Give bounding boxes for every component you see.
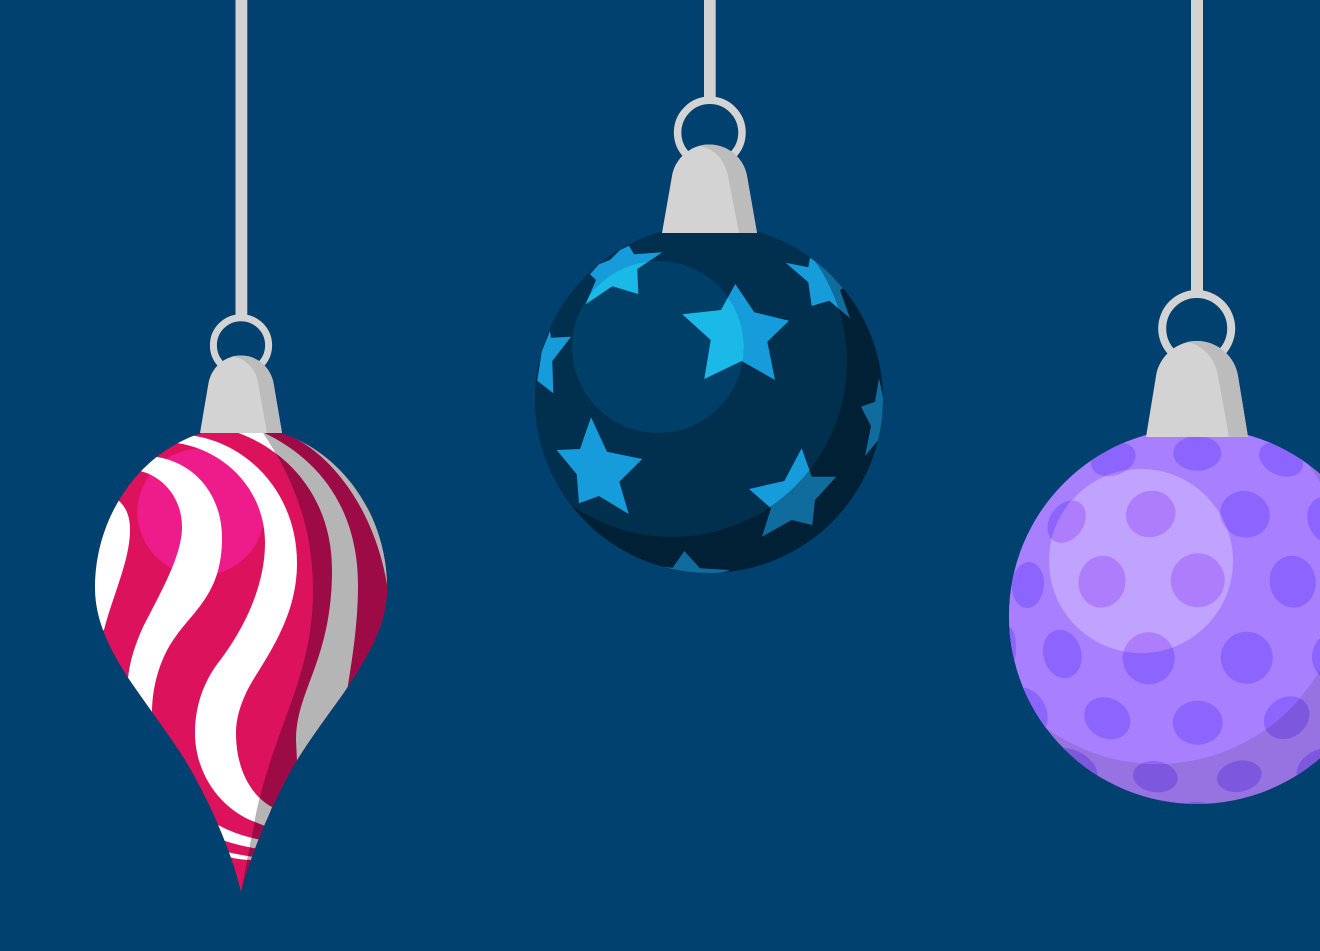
hanger: purple bauble string and ring — [1162, 0, 1231, 363]
ball body with stars, shading and highlight — [535, 232, 883, 573]
hanger: red bauble string and ring — [213, 0, 269, 373]
cap: red bauble — [200, 356, 282, 433]
bauble: purple with dots — [1009, 0, 1320, 804]
bauble: red striped teardrop — [80, 0, 400, 895]
ball body with dots, shading and highlight — [1009, 435, 1320, 804]
bauble: dark blue with stars — [535, 0, 883, 573]
cap: purple bauble — [1146, 341, 1248, 437]
hanger: blue bauble string and ring — [678, 0, 742, 165]
teardrop body with wavy stripes — [95, 433, 387, 892]
cap: blue bauble — [662, 144, 757, 233]
